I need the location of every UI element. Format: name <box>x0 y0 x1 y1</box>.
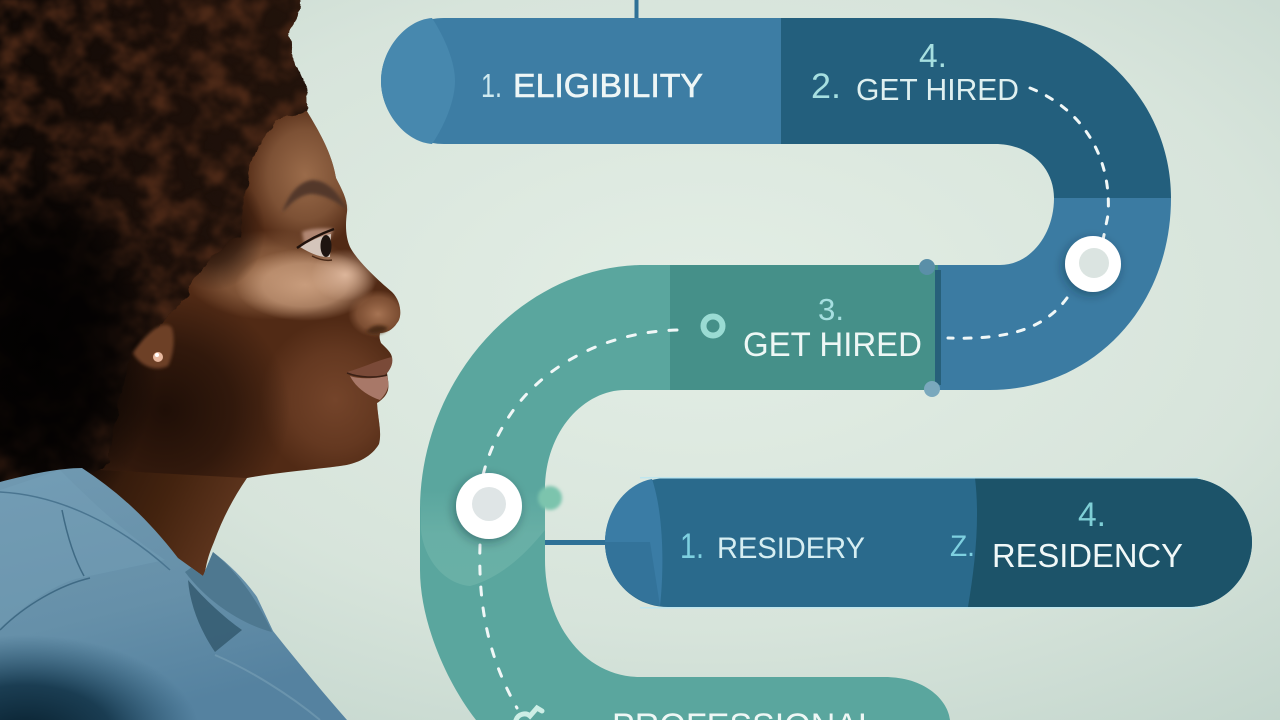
highlight blob under marker <box>421 490 545 586</box>
label: 3. Get hired: GET HIRED <box>743 326 922 364</box>
label: Z. 4. Residency: 4. <box>1078 496 1106 534</box>
lips <box>347 357 392 400</box>
label: 3. Get hired <box>743 292 922 364</box>
label: 1. Residery: RESIDERY <box>717 532 865 565</box>
hair <box>0 0 309 530</box>
label: 1. Residery <box>680 527 865 566</box>
label: 1. Eligibility: 1. <box>481 67 502 104</box>
dashed route: lower <box>480 330 677 708</box>
eye <box>297 228 334 260</box>
label: 4. 2. Get hired <box>811 37 1019 107</box>
label: 1. Residery: 1. <box>680 527 704 566</box>
nostril <box>366 325 388 334</box>
marker: bottom node <box>924 381 940 397</box>
path segment: get hired teal <box>670 265 941 390</box>
woman in profile <box>0 0 410 720</box>
label: 4. 2. Get hired: 4. <box>919 37 947 74</box>
denim shirt <box>0 468 347 720</box>
label: Z. 4. Residency: RESIDENCY <box>992 537 1183 574</box>
marker: top node <box>919 259 935 275</box>
ear and earring <box>133 325 174 368</box>
marker: teal ring <box>704 316 722 336</box>
path segment: eligibility <box>381 18 781 144</box>
eyebrow <box>282 180 347 213</box>
label: 1. Eligibility: ELIGIBILITY <box>513 67 703 104</box>
path segment: get hired dark curve <box>781 18 1171 198</box>
label: 3. Get hired: 3. <box>818 292 844 327</box>
label: Z. 4. Residency <box>950 496 1183 574</box>
dashed route: upper <box>948 88 1108 338</box>
marker: lower white circle <box>456 473 522 539</box>
hair dark shade <box>0 150 160 530</box>
neck <box>60 430 260 590</box>
marker: upper white circle <box>1065 236 1121 292</box>
path segment: residency pill <box>605 477 1252 608</box>
connector: residency branch line <box>543 540 607 545</box>
label: Z. 4. Residency: Z. <box>950 530 975 563</box>
face <box>100 111 400 478</box>
path segment: blue return curve <box>935 198 1171 390</box>
label: 4. 2. Get hired: GET HIRED <box>856 72 1019 107</box>
label: 4. 2. Get hired: 2. <box>811 67 841 106</box>
marker: green node <box>538 486 562 510</box>
path segment: teal long curve <box>420 265 950 720</box>
icon: check mark <box>516 708 542 720</box>
career pathway diagram <box>381 0 1252 720</box>
connector: top line <box>634 0 638 20</box>
